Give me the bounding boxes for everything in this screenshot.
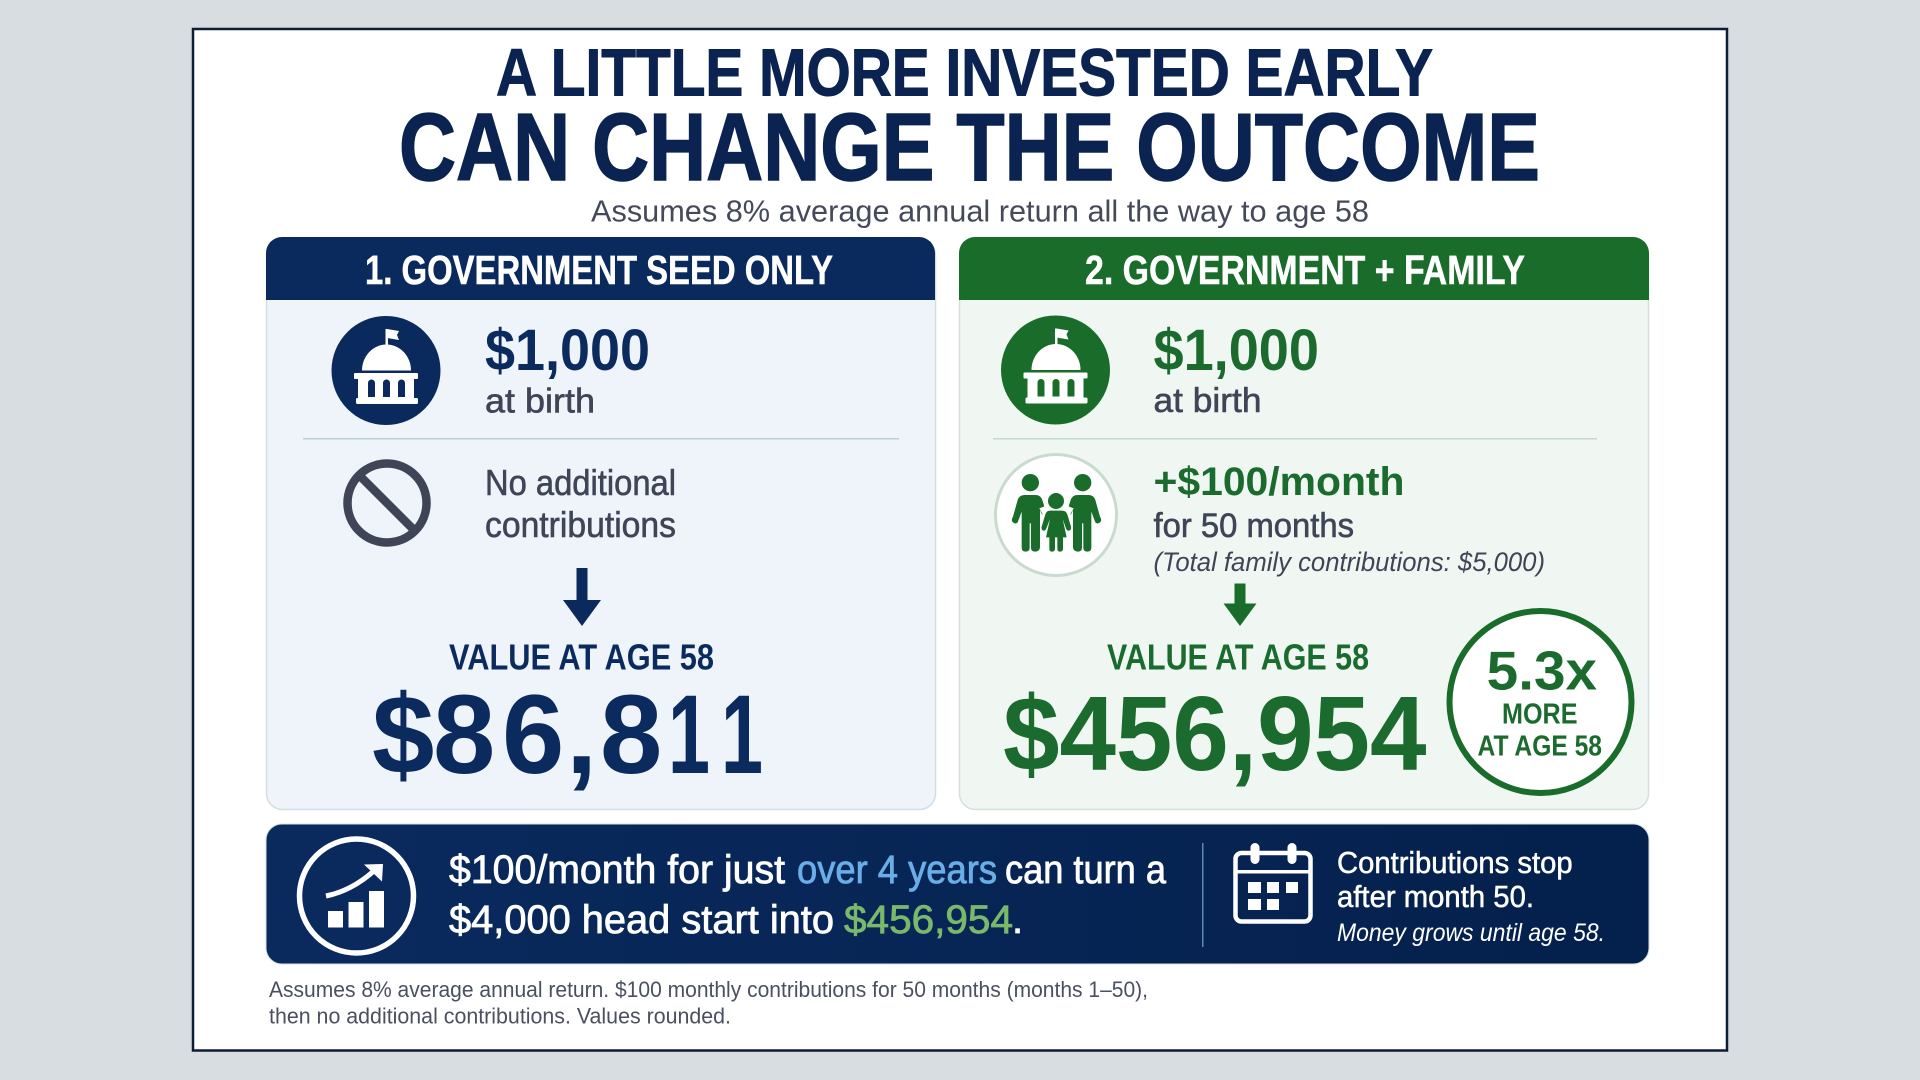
seed amount — [1154, 318, 1319, 420]
contributions stop text: Contributions stop — [1337, 845, 1573, 880]
panel 2 header — [959, 237, 1649, 300]
value amount: 1 — [721, 672, 763, 797]
seed amount: at birth — [1154, 382, 1262, 420]
multiplier badge — [1450, 611, 1632, 793]
subtitle: Assumes 8% average annual return all the way to age 58 — [591, 194, 1369, 228]
white framed page — [193, 29, 1727, 1050]
takeaway text: $100/month for just — [449, 848, 785, 892]
title: CAN CHANGE THE OUTCOME — [399, 94, 1540, 201]
panel 1 body — [266, 240, 936, 810]
title: A LITTLE MORE INVESTED EARLY — [496, 36, 1433, 110]
arrow down — [563, 568, 601, 626]
takeaway text: . — [1012, 898, 1023, 942]
arrow down — [1224, 584, 1256, 626]
seed amount — [485, 318, 650, 420]
footnote: Assumes 8% average annual return. $100 monthly contributions for 50 months (months 1–50), — [269, 977, 1148, 1002]
panel 2 header: 2. GOVERNMENT + FAMILY — [1085, 247, 1525, 293]
panel: government plus family — [959, 237, 1649, 810]
takeaway text: can turn a — [1005, 848, 1167, 892]
value amount: $86,8 — [372, 672, 662, 797]
family contribution text: (Total family contributions: $5,000) — [1154, 547, 1545, 577]
family contribution text — [1154, 460, 1545, 577]
icon: growth chart — [300, 839, 414, 953]
icon: no contributions symbol — [348, 464, 426, 542]
panel 2 body — [960, 240, 1648, 810]
seed amount: at birth — [485, 382, 595, 420]
seed amount: $1,000 — [485, 318, 650, 383]
icon: family — [996, 454, 1116, 576]
takeaway text: $456,954 — [844, 898, 1013, 942]
footnote — [269, 977, 1148, 1028]
contributions stop text — [1337, 845, 1605, 947]
contributions stop text: Money grows until age 58. — [1337, 919, 1605, 947]
no additional contributions text: contributions — [485, 504, 676, 545]
takeaway text: over 4 years — [797, 848, 997, 892]
takeaway text — [449, 848, 1167, 942]
seed amount: $1,000 — [1154, 318, 1319, 383]
panel: government seed only — [266, 237, 936, 810]
value label: VALUE AT AGE 58 — [1107, 636, 1369, 678]
banner: key takeaway — [266, 824, 1649, 964]
family contribution text: for 50 months — [1154, 507, 1354, 545]
icon: government building — [1001, 316, 1110, 424]
multiplier badge: MORE — [1502, 698, 1578, 730]
panel 1 header: 1. GOVERNMENT SEED ONLY — [365, 247, 833, 293]
footnote: then no additional contributions. Values rounded. — [269, 1004, 731, 1028]
no additional contributions text — [485, 462, 676, 545]
takeaway text: $4,000 head start into — [449, 898, 834, 942]
no additional contributions text: No additional — [485, 462, 676, 503]
value amount: 1 — [668, 672, 710, 797]
icon: government building — [332, 316, 440, 425]
panel 1 header — [266, 237, 935, 300]
value amount: $456,954 — [1003, 675, 1427, 793]
icon: calendar — [1236, 843, 1310, 922]
multiplier badge: 5.3x — [1487, 640, 1597, 702]
contributions stop text: after month 50. — [1337, 879, 1534, 914]
value label: VALUE AT AGE 58 — [449, 636, 714, 678]
family contribution text: +$100/month — [1154, 460, 1404, 504]
title — [399, 36, 1540, 201]
multiplier badge: AT AGE 58 — [1478, 730, 1602, 762]
